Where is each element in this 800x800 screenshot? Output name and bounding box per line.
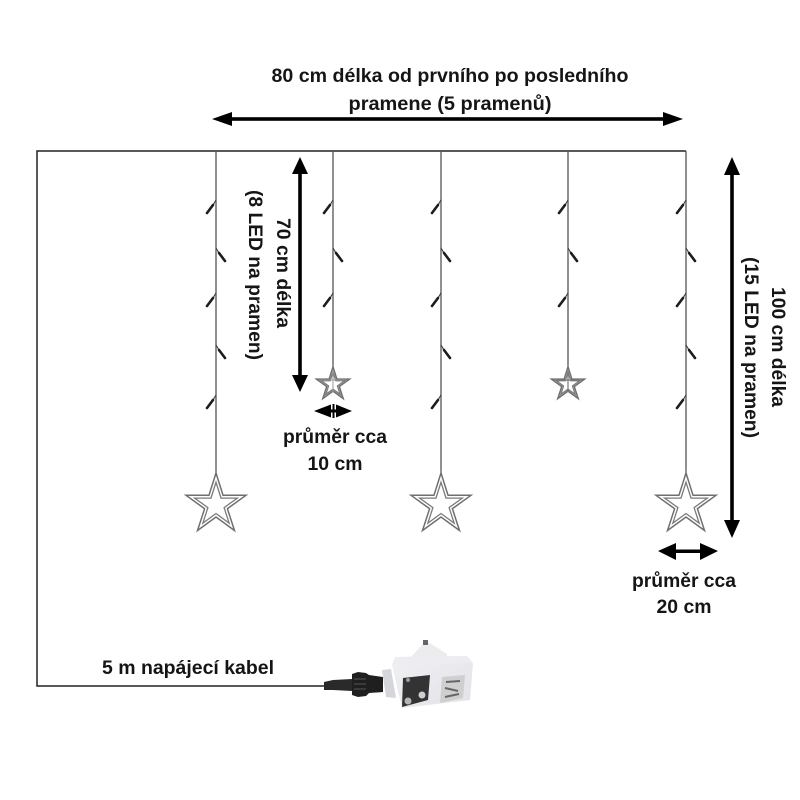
housing top edge (392, 656, 473, 665)
strand 4 with small star (552, 151, 584, 399)
label: long strand LED count: (15 LED na pramen) (740, 257, 761, 438)
label: short strand LED count: (8 LED na pramen) (244, 190, 265, 360)
collar (382, 669, 396, 698)
label: small star diameter (283, 427, 387, 475)
title: total width label: pramene (5 pramenů) (348, 94, 552, 115)
arrow: short strand length (292, 157, 308, 392)
label: large star diameter: průměr cca (632, 571, 736, 592)
arrow: total width (212, 112, 683, 126)
label: short strand length: 70 cm délka (272, 218, 293, 328)
title: total width label (272, 66, 628, 115)
icon: power adapter with connector (324, 640, 473, 708)
strand 2 with small star (316, 151, 350, 399)
title: total width label: 80 cm délka od prvního po posledního (272, 66, 628, 87)
arrow: large star diameter (658, 543, 718, 560)
housing (392, 656, 473, 708)
strand 5 with large star (656, 151, 716, 530)
strand 1 with large star (186, 151, 246, 530)
label: large star diameter: 20 cm (656, 597, 712, 618)
label: large star diameter (632, 571, 736, 618)
arrow: long strand length (724, 157, 740, 538)
label: small star diameter: průměr cca (283, 427, 387, 448)
connector nut (352, 672, 383, 697)
connector tail (324, 679, 352, 691)
strand 3 with large star (411, 151, 471, 530)
plug (412, 642, 447, 660)
arrow: small star diameter (314, 404, 352, 418)
black sticker (402, 675, 430, 707)
label: small star diameter: 10 cm (308, 454, 362, 475)
supply cable and top wire (37, 151, 686, 686)
label: long strand length: 100 cm délka (767, 287, 788, 407)
label: power cable: 5 m napájecí kabel (102, 658, 274, 679)
silver sticker (440, 675, 465, 703)
